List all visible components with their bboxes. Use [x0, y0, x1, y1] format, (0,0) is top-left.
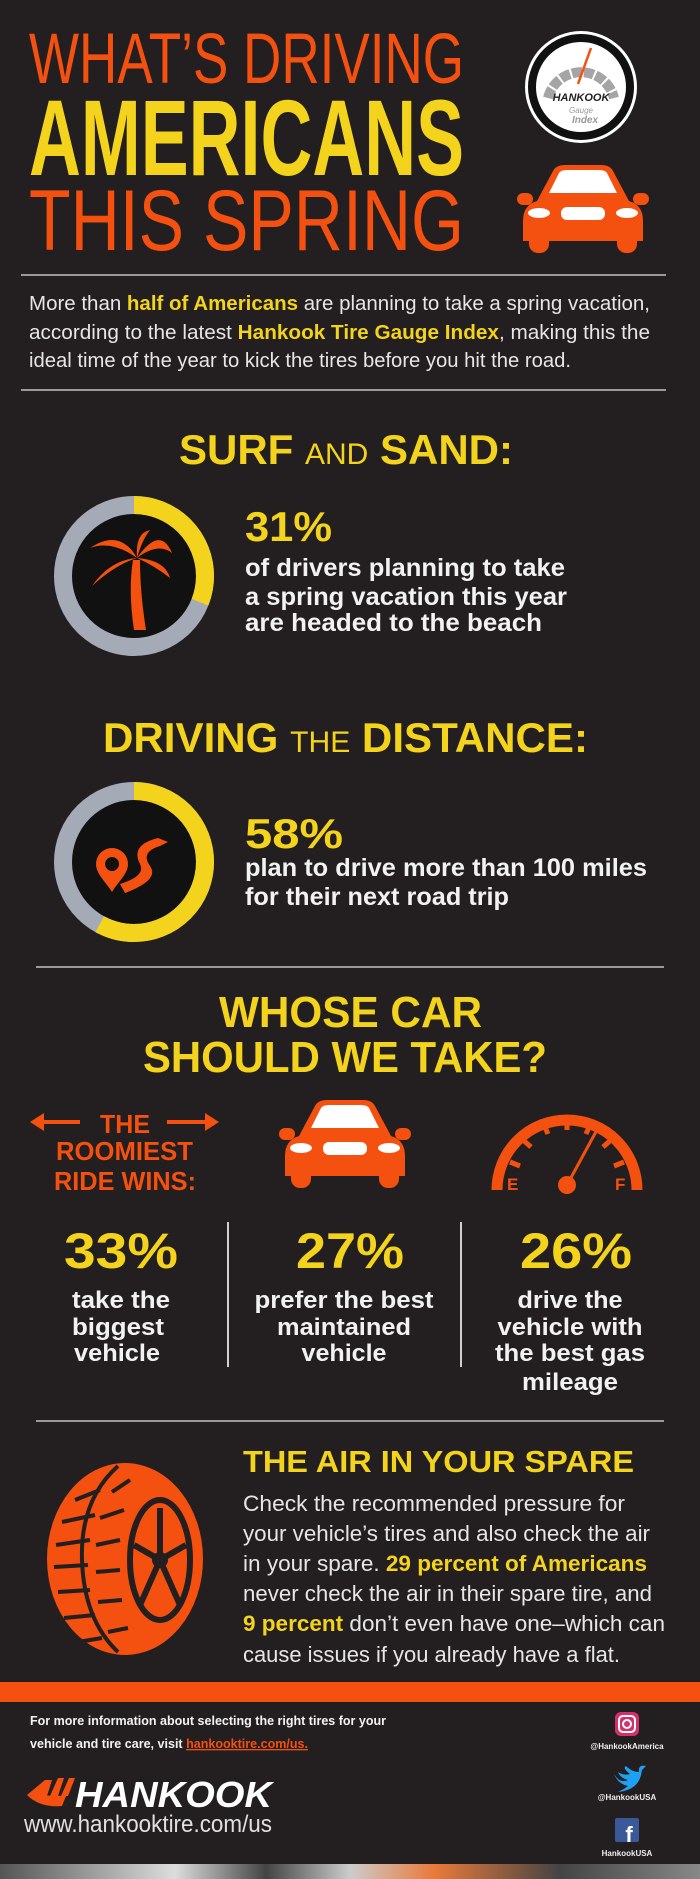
text block: spare tire: never check the air in their spare tire, and [243, 1581, 652, 1606]
stat: 33% [64, 1223, 178, 1367]
intro text: More than half of Americans are planning to take a spring vacation, [29, 293, 650, 315]
heading: whose car should we take: SHOULD WE TAKE? [143, 1033, 547, 1082]
icon: facebook: HankookUSA [602, 1849, 653, 1858]
stat: 31%: 31% [245, 503, 332, 550]
stat: 27%: prefer the best [254, 1287, 434, 1314]
icon: car [279, 1100, 411, 1188]
icon: fuel gauge [497, 1120, 637, 1194]
title [29, 20, 464, 269]
stat: 33%: 33% [64, 1223, 178, 1279]
label: the roomiest ride wins with arrows: THE [100, 1109, 150, 1139]
stat: 27% [254, 1223, 434, 1367]
heading: surf and sand: SURF AND SAND: [179, 426, 513, 473]
icon: fuel gauge: F [615, 1175, 625, 1194]
stat: 33%: biggest [72, 1314, 164, 1341]
stat: 58%: 58% [245, 810, 343, 857]
icon: twitter: @HankookUSA [598, 1793, 656, 1802]
stat: 26%: the best gas [495, 1340, 645, 1367]
text block: spare tire [243, 1491, 665, 1667]
stat: 58%: for their next road trip [245, 883, 509, 911]
title: THIS SPRING [29, 173, 464, 269]
stat: 33%: vehicle [74, 1340, 160, 1367]
icon: Hankook Gauge Index badge [525, 31, 637, 143]
icon: Hankook Gauge Index badge: Index [572, 115, 598, 126]
title: AMERICANS [29, 77, 464, 198]
label: the roomiest ride wins with arrows: ROOMIEST [56, 1136, 193, 1166]
heading: driving the distance: DRIVING THE DISTANCE: [103, 714, 588, 761]
stat: 27%: vehicle [302, 1340, 386, 1367]
intro text: ideal time of the year to kick the tires before you hit the road. [29, 350, 571, 372]
label: the roomiest ride wins with arrows [30, 1109, 219, 1196]
stat: 27%: 27% [296, 1223, 404, 1279]
footer text: vehicle and tire care, visit hankooktire.com/us. [30, 1736, 308, 1751]
footer text: For more information about selecting the right tires for your [30, 1713, 386, 1728]
stat: 31%: of drivers planning to take [245, 554, 565, 582]
icon: road and pin [96, 838, 168, 893]
icon: Hankook Gauge Index badge: HANKOOK [553, 92, 610, 104]
text block: spare tire: cause issues if you already have a flat. [243, 1642, 620, 1667]
stat: 27%: maintained [277, 1314, 411, 1341]
icon: palm tree [90, 530, 172, 630]
stat: 31%: a spring vacation this year [245, 583, 567, 611]
heading: the air in your spare: THE AIR IN YOUR SPARE [243, 1444, 634, 1479]
website url: www.hankooktire.com/us [23, 1811, 272, 1838]
stat: 26%: mileage [522, 1369, 618, 1396]
logo: Hankook: HANKOOK [75, 1774, 275, 1815]
heading: whose car should we take: WHOSE CAR [219, 988, 482, 1037]
orange band [0, 1682, 700, 1702]
icon: tire [47, 1463, 203, 1655]
donut chart: 31% beach [63, 505, 205, 647]
stat: 26%: 26% [520, 1223, 632, 1279]
text block: spare tire: Check the recommended pressure for [243, 1491, 625, 1516]
stat: 31% [245, 503, 567, 637]
intro text: according to the latest Hankook Tire Gauge Index , making this the [29, 322, 650, 344]
stat: 26%: drive the [518, 1287, 622, 1314]
icon: fuel gauge: E [507, 1175, 518, 1194]
label: the roomiest ride wins with arrows: RIDE WINS: [54, 1166, 196, 1196]
title: WHAT’S DRIVING [29, 20, 464, 99]
icon: twitter [598, 1766, 656, 1802]
text block: spare tire: your vehicle’s tires and also check the air [243, 1521, 650, 1546]
text block: spare tire: 9 percent don’t even have one–which can [243, 1611, 665, 1636]
intro text [29, 293, 650, 372]
stat: 31%: are headed to the beach [245, 609, 542, 637]
donut chart: 58% drive 100 miles [63, 791, 205, 933]
icon: instagram: @HankookAmerica [590, 1742, 664, 1751]
stat: 33%: take the [72, 1287, 170, 1314]
footer text [30, 1713, 386, 1751]
text block: spare tire: in your spare. 29 percent of Americans [243, 1551, 647, 1576]
icon: Hankook Gauge Index badge: Gauge [569, 106, 594, 115]
stat: 58%: plan to drive more than 100 miles [245, 854, 647, 882]
icon: car [517, 165, 649, 253]
icon: instagram [590, 1712, 664, 1751]
stat: 58% [245, 810, 647, 911]
icon: facebook [602, 1818, 653, 1858]
stat: 26%: vehicle with [498, 1314, 642, 1341]
icon: facebook: f [625, 1822, 633, 1847]
heading: whose car should we take [143, 988, 547, 1082]
stat: 26% [495, 1223, 645, 1396]
